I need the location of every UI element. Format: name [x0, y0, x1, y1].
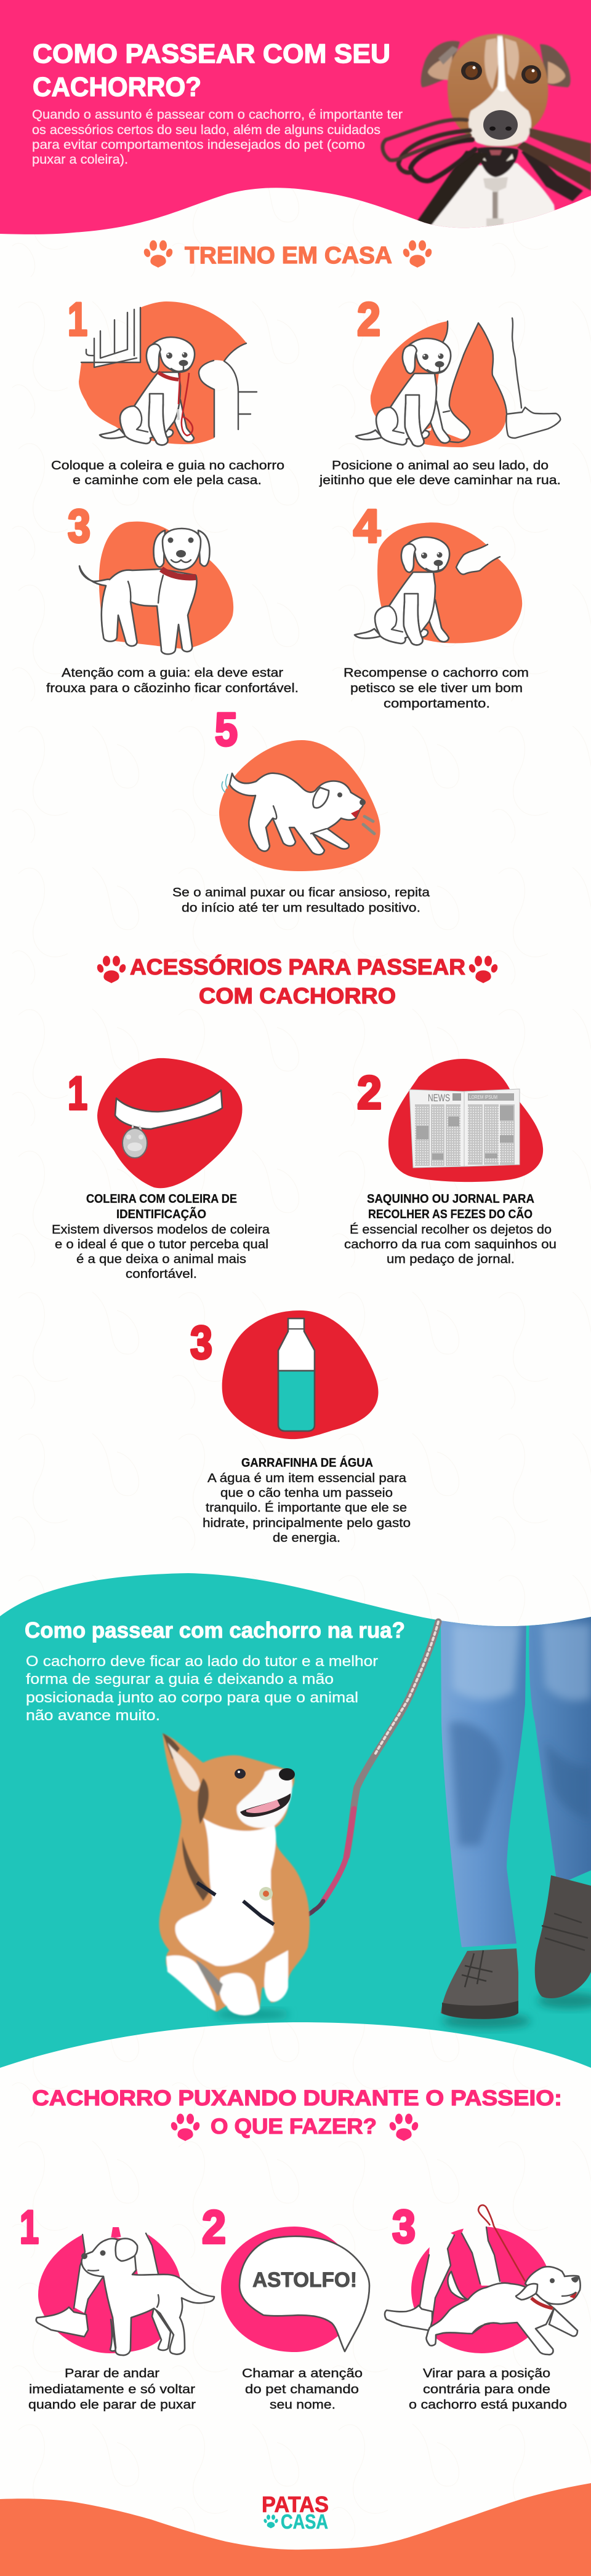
heading: acessorios: COM CACHORRO: [199, 983, 396, 1008]
orange egg blob: [219, 740, 380, 871]
caption: imediatamente e só voltar: [29, 2383, 195, 2396]
red blob: [388, 1059, 543, 1182]
caption: Recompense o cachorro com: [344, 666, 529, 680]
orange blob: [99, 522, 233, 649]
number 2: 2: [202, 2201, 226, 2254]
number 3: 3: [392, 2201, 416, 2253]
window: [81, 308, 140, 367]
speech bubble: [239, 2236, 369, 2351]
pink blob: [38, 2227, 185, 2353]
tutor legs and shoe: [385, 2218, 502, 2331]
intro paragraph: puxar a coleira).: [32, 153, 128, 167]
caption: [172, 886, 430, 915]
number 3: 3: [68, 500, 90, 552]
title and description: [52, 1192, 270, 1281]
sitting dog with leash: [100, 337, 195, 445]
title and description: um pedaço de jornal.: [387, 1253, 515, 1266]
accessory 1: collar: [52, 1058, 270, 1281]
red blob: [97, 1058, 243, 1188]
panel paragraph: não avance muito.: [26, 1707, 160, 1724]
caption: quando ele parar de puxar: [28, 2398, 196, 2412]
step 2: [319, 293, 561, 487]
caption: petisco se ele tiver um bom: [350, 682, 523, 695]
logo: PATAS: [262, 2492, 329, 2517]
caption: [344, 666, 529, 711]
caption: frouxa para o cãozinho ficar confortável.: [46, 682, 299, 695]
panel title: Como passear com cachorro na rua?: [25, 1617, 405, 1643]
collar illustration: [115, 1090, 222, 1158]
title and description: tranquilo. É importante que ele se: [206, 1501, 407, 1515]
number 2: 2: [357, 293, 380, 346]
orange blob: [377, 522, 522, 643]
title and description: IDENTIFICAÇÃO: [116, 1207, 206, 1221]
accessory 3: water bottle: [190, 1310, 411, 1545]
caption: Coloque a coleira e guia no cachorro: [51, 459, 284, 473]
caption: o cachorro está puxando: [409, 2398, 567, 2412]
title and description: cachorro da rua com saquinhos ou: [344, 1238, 557, 1251]
title and description: hidrate, principalmente pelo gasto: [203, 1517, 411, 1530]
intro paragraph: para evitar comportamentos indesejados do pet (como: [32, 138, 365, 152]
title: [33, 39, 390, 102]
heading: cachorro puxando: [32, 2086, 562, 2141]
panel paragraph: O cachorro deve ficar ao lado do tutor e a melhor: [26, 1653, 378, 1670]
caption: e caminhe com ele pela casa.: [73, 474, 262, 487]
panel paragraph: posicionada junto ao corpo para que o animal: [26, 1689, 358, 1706]
intro paragraph: os acessórios certos do seu lado, além de alguns cuidados: [32, 123, 380, 137]
newspaper illustration: LOREM IPSUM: [469, 1095, 497, 1100]
heading: acessorios: ACESSÓRIOS PARA PASSEAR: [130, 954, 465, 979]
caption: Posicione o animal ao seu lado, do: [332, 459, 549, 473]
orange blob: [79, 301, 246, 444]
logo: [262, 2492, 329, 2533]
title and description: é a que deixa o animal mais: [76, 1253, 246, 1266]
accessory 2: newspaper: [344, 1059, 557, 1266]
leash: [478, 2205, 525, 2281]
title and description: que o cão tenha um passeio: [220, 1486, 393, 1500]
running dog: [427, 2267, 581, 2355]
street walk panel: [0, 1573, 591, 2068]
title and description: COLEIRA COM COLEIRA DE: [86, 1192, 237, 1206]
tutor legs and shoes: [443, 318, 560, 442]
sofa lines: [199, 343, 257, 437]
standing dog: [79, 528, 209, 654]
title and description: de energia.: [273, 1531, 340, 1545]
caption: Chamar a atenção: [242, 2367, 363, 2380]
title and description: Existem diversos modelos de coleira: [52, 1223, 270, 1237]
caption: do início até ter um resultado positivo.: [182, 901, 420, 915]
step 3: [46, 500, 299, 695]
caption: jeitinho que ele deve caminhar na rua.: [319, 474, 561, 487]
logo: CASA: [281, 2510, 328, 2533]
caption: Parar de andar: [65, 2367, 159, 2380]
title: CACHORRO?: [33, 72, 201, 102]
caption: [28, 2367, 196, 2412]
sitting dog: [356, 338, 451, 446]
pink blob: [411, 2227, 552, 2353]
number 5: 5: [215, 704, 238, 756]
caption: Se o animal puxar ou ficar ansioso, repita: [172, 886, 430, 899]
sitting dog: [355, 537, 449, 645]
panel paragraph: [26, 1653, 378, 1724]
panel paragraph: forma de segurar a guia é deixando a mão: [26, 1671, 334, 1688]
step 5: [172, 704, 430, 915]
caption: do pet chamando: [245, 2383, 359, 2396]
newspaper illustration: [409, 1089, 520, 1168]
heading: treino em casa: [143, 240, 433, 269]
heading: acessorios: [96, 954, 499, 1008]
caption: seu nome.: [270, 2398, 336, 2412]
hero pink wave background: [0, 0, 591, 234]
leash: [271, 1622, 438, 1923]
number 1: 1: [68, 293, 87, 346]
title and description: RECOLHER AS FEZES DO CÃO: [368, 1207, 533, 1221]
orange blob: [371, 321, 506, 447]
intro paragraph: [32, 108, 403, 167]
title and description: É essencial recolher os dejetos do: [350, 1222, 552, 1237]
title and description: [203, 1456, 411, 1545]
photo: tutor legs and shoes: [441, 1615, 591, 2029]
title and description: GARRAFINHA DE ÁGUA: [241, 1456, 373, 1470]
caption: Virar para a posição: [423, 2367, 550, 2380]
step 4: [344, 500, 529, 711]
photo: corgi: [159, 1733, 310, 2019]
heading: cachorro puxando: O QUE FAZER?: [211, 2115, 377, 2139]
standing dog: [81, 2238, 214, 2355]
play bow dog: [222, 773, 374, 855]
caption: comportamento.: [384, 697, 490, 711]
caption: [51, 459, 284, 487]
red blob: [222, 1310, 379, 1439]
caption: [319, 459, 561, 487]
heading: treino em casa: TREINO EM CASA: [185, 242, 392, 269]
name text: ASTOLFO!: [252, 2268, 357, 2292]
number 2: 2: [357, 1067, 382, 1119]
tip 3: [385, 2201, 581, 2412]
number 1: 1: [20, 2201, 39, 2254]
step 1: [51, 293, 284, 487]
title and description: e o ideal é que o tutor perceba qual: [55, 1238, 268, 1251]
number 1: 1: [68, 1067, 87, 1120]
title and description: SAQUINHO OU JORNAL PARA: [367, 1192, 534, 1206]
caption: contrária para onde: [423, 2383, 550, 2396]
title and description: confortável.: [126, 1267, 197, 1281]
caption: [409, 2367, 567, 2412]
tutor legs and shoe: [36, 2226, 159, 2337]
tip 1: [20, 2201, 214, 2412]
photo: dog holding leash: [382, 34, 591, 231]
caption: [242, 2367, 363, 2412]
number 4: 4: [353, 500, 380, 552]
number 3: 3: [190, 1317, 212, 1369]
title and description: [344, 1192, 557, 1266]
teal wave background: [0, 1573, 591, 2068]
title: COMO PASSEAR COM SEU: [33, 39, 390, 69]
title and description: A água é um item essencial para: [207, 1472, 407, 1485]
intro paragraph: Quando o assunto é passear com o cachorro, é importante ter: [32, 108, 403, 122]
newspaper illustration: NEWS: [428, 1092, 450, 1104]
tip 2: [202, 2201, 369, 2412]
hand with treat: [456, 544, 500, 574]
caption: [46, 666, 299, 695]
caption: Atenção com a guia: ela deve estar: [62, 666, 283, 680]
hero banner: [0, 0, 591, 234]
pink blob: [221, 2227, 361, 2352]
bottle illustration: [278, 1318, 315, 1431]
footer orange wave: [0, 2483, 591, 2576]
heading: cachorro puxando: CACHORRO PUXANDO DURANTE O PASSEIO:: [32, 2086, 562, 2110]
